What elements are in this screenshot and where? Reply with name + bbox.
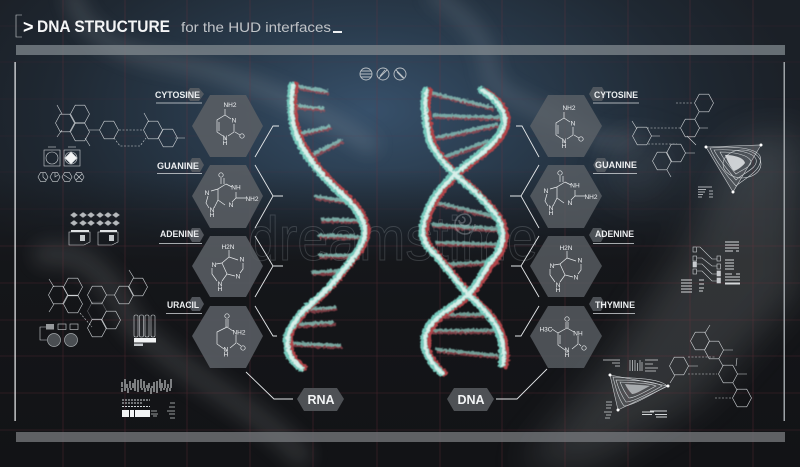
hexagons right [530,87,609,368]
molecule: thymine right: H3C [539,326,553,334]
molecule: adenine right [550,245,583,294]
molecule: adenine left: N [236,274,241,280]
icon: watermark spiral [455,214,475,234]
label: guanine left: GUANINE [157,161,199,172]
molecule: thymine right [539,317,586,359]
radar chart: bottom right [608,374,670,412]
molecule: cytosine right: H [562,143,567,150]
label: guanine right: GUANINE [595,160,637,171]
molecule: thymine right: N [565,347,570,354]
molecule: uracil left: NH2 [232,330,246,336]
title [16,15,342,37]
molecule: uracil left: N [224,346,229,354]
label: cytosine left: CYTOSINE [155,90,200,101]
molecule: adenine left: N [218,281,223,288]
label: uracil left: URACIL [167,300,199,311]
RNA helix [286,85,367,368]
molecule: adenine left [212,244,245,293]
molecule: guanine right [544,171,598,217]
molecule: guanine right: H [549,210,554,217]
title: DNA STRUCTURE [37,17,170,36]
molecule: guanine right: NH2 [584,194,598,201]
icons: top circles [360,68,406,80]
molecule: cytosine left: NH2 [223,102,237,109]
molecule: guanine right: N [544,188,549,195]
molecule: adenine right: N [556,282,561,289]
molecule: adenine right: H2N [559,245,573,252]
molecule: guanine left: NH2 [245,196,259,203]
molecule: adenine right: N [578,258,583,264]
molecule: cytosine right: N [571,120,576,128]
molecule: guanine right: NH [570,182,580,190]
label: adenine right: ADENINE [595,229,634,240]
molecule: uracil left [217,314,246,358]
title: for the HUD interfaces [181,19,331,35]
hexagon network: top left [56,105,185,147]
molecule: cytosine left: N [223,135,228,142]
molecule: guanine left: N [210,207,215,214]
icons: diamond grid [69,212,120,245]
right frame line [784,62,785,421]
circuit widget [681,242,740,292]
molecule: guanine right: N [568,200,573,207]
molecule: guanine left: N [229,202,234,209]
molecule: adenine left: N [240,256,245,264]
molecule: adenine right: N [574,274,579,282]
label: adenine left: ADENINE [160,229,199,240]
molecule: guanine left: N [205,190,210,197]
left frame line [14,62,16,421]
molecule: thymine right: NH [573,330,583,338]
badge: RNA [297,388,344,411]
badge: DNA [447,388,494,411]
hexagons left [186,88,263,368]
molecule: uracil left: H [224,352,229,358]
watermark: dreamstime [248,205,538,274]
molecule: cytosine right: N [562,138,567,145]
hexagon network: lower right [670,325,752,407]
molecule: adenine left: H [218,286,223,293]
icons: lower left control [40,324,78,346]
molecule: cytosine right: NH2 [562,105,576,112]
molecule: adenine right: N [550,263,555,270]
molecule: adenine right: H [556,287,561,294]
connectors left [246,126,293,399]
molecule: adenine left: N [212,262,217,269]
molecule: guanine left: H [210,212,215,219]
bottom bar [16,432,785,442]
data text block: top right [698,187,713,197]
panel: left RNA bases [155,88,344,411]
molecule: cytosine right [556,105,583,150]
radar chart: top right [704,144,762,194]
icons: camera panel [38,147,84,181]
waveform chart [122,379,175,418]
bars and text: bottom right [603,360,667,418]
panel: right DNA bases [447,87,639,411]
label: thymine right: THYMINE [595,300,635,311]
molecule: guanine left [205,173,259,219]
molecule: cytosine left: N [232,118,237,124]
label: cytosine right: CYTOSINE [594,90,638,101]
molecule: adenine left: H2N [221,244,235,251]
molecule: guanine right: N [549,205,554,212]
top bar [16,45,785,55]
molecule: thymine right: H [565,352,570,359]
connectors right [496,126,547,399]
DNA helix [422,90,507,373]
hexagon network: top right [632,94,714,177]
bar widget [134,315,156,346]
badge: RNA: RNA [307,393,335,407]
molecule: guanine left: NH [231,184,241,192]
label: adenine right [593,229,634,244]
hexagon network: lower left [48,270,148,337]
badge: DNA: DNA [457,393,485,407]
molecule: cytosine left [217,102,244,147]
molecule: cytosine left: H [223,140,228,147]
title: > [23,17,34,37]
